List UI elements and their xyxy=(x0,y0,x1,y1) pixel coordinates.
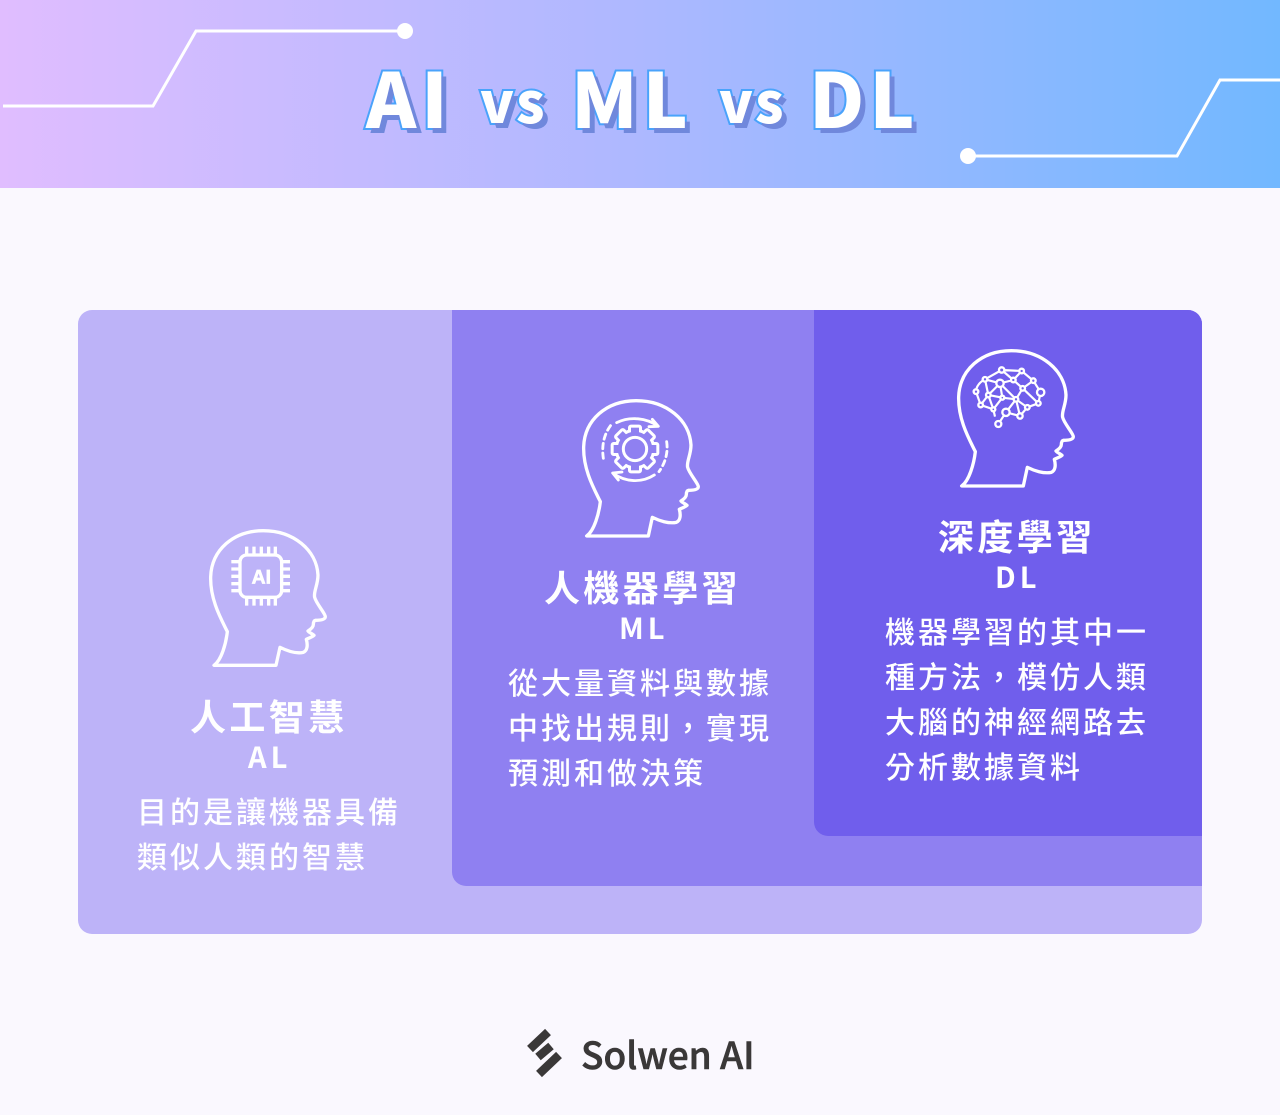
text block: DL description: 機器學習的其中一 xyxy=(885,608,1149,652)
logo: Solwen AI xyxy=(527,1026,755,1080)
icon: head with AI chip: AI xyxy=(252,567,271,588)
header banner xyxy=(0,0,1280,188)
panel: ML xyxy=(452,310,1202,886)
title: AI xyxy=(366,40,453,150)
text block: DL description: 分析數據資料 xyxy=(885,743,1083,787)
circuit line left xyxy=(3,23,413,108)
title: vs xyxy=(480,59,547,140)
text block: DL description: 種方法，模仿人類 xyxy=(885,653,1149,697)
text block: AI description: 目的是讓機器具備 xyxy=(137,788,401,832)
logo wordmark: Solwen AI xyxy=(581,1026,755,1080)
text block: AI description xyxy=(137,788,401,877)
text block: DL description xyxy=(885,608,1149,787)
icon: logo mark xyxy=(527,1028,562,1078)
title: ML xyxy=(571,40,693,150)
circuit line right xyxy=(960,78,1280,164)
title: vs xyxy=(719,59,786,140)
text block: AI description: 類似人類的智慧 xyxy=(137,833,368,877)
subheading: ML: ML xyxy=(619,606,668,648)
subheading: DL: DL xyxy=(995,555,1040,597)
text block: ML description xyxy=(508,659,772,793)
panel: AI xyxy=(78,310,1202,934)
text block: ML description: 從大量資料與數據 xyxy=(508,659,772,703)
subheading: AL: AL xyxy=(248,735,291,777)
title xyxy=(362,40,920,150)
text block: ML description: 中找出規則，實現 xyxy=(508,704,772,748)
panel: DL xyxy=(814,310,1202,836)
text block: DL description: 大腦的神經網路去 xyxy=(885,698,1149,742)
heading: 深度學習: 深度學習 xyxy=(938,509,1096,561)
title: DL xyxy=(809,40,920,150)
heading: 人工智慧: 人工智慧 xyxy=(190,689,348,741)
heading: 人機器學習: 人機器學習 xyxy=(544,560,741,612)
text block: ML description: 預測和做決策 xyxy=(508,749,706,793)
